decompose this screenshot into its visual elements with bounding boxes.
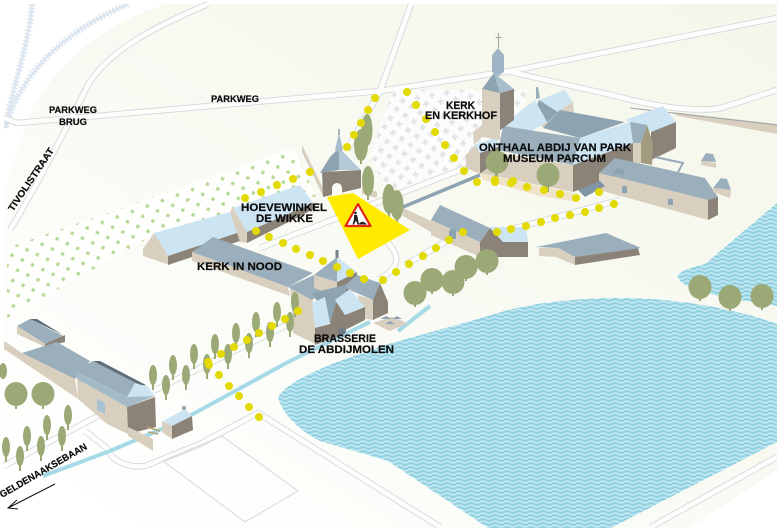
building: kerk in nood — [192, 237, 313, 296]
label: parkweg brug: BRUG — [59, 117, 87, 128]
building: hoevewinkel barn — [143, 185, 316, 265]
entrance steps — [578, 181, 605, 197]
small sheds east — [701, 153, 731, 198]
label: kerk en kerkhof — [425, 100, 497, 122]
lake — [278, 298, 777, 528]
building: gate — [302, 129, 377, 198]
trees: near gate — [354, 114, 404, 224]
label: hoevewinkel de wikke: DE WIKKE — [256, 213, 313, 225]
label: onthaal abdij van park museum parcum: ONTHAAL ABDIJ VAN PARK — [479, 142, 631, 154]
stream — [43, 306, 430, 476]
trees: row along lake — [404, 249, 498, 307]
building: small block west — [17, 319, 65, 347]
label: tivolistraat: TIVOLISTRAAT — [6, 146, 57, 214]
churchyard field — [370, 90, 528, 192]
wall right of abbey — [630, 108, 777, 134]
label: parkweg: PARKWEG — [211, 94, 259, 105]
building: long barn east — [599, 157, 718, 220]
building: flat shed — [536, 233, 641, 265]
building: church tower — [482, 33, 514, 140]
green planted field — [7, 148, 316, 318]
label: brasserie de abdijmolen: DE ABDIJMOLEN — [299, 344, 394, 356]
building: small house by stream — [162, 406, 193, 439]
label: geldenaaksebaan: GELDENAAKSEBAAN — [0, 442, 89, 501]
label: brasserie de abdijmolen — [299, 333, 394, 356]
pond upper right — [678, 203, 777, 306]
building: mill farm — [4, 341, 160, 451]
building: front farm — [403, 175, 528, 257]
trees: round lower left — [0, 363, 54, 409]
railway tracks — [5, 4, 128, 128]
construction zone — [327, 193, 410, 259]
icon: road works sign — [346, 204, 370, 226]
terrace with parasols — [373, 316, 408, 331]
building: brasserie de abdijmolen — [288, 250, 388, 345]
label: onthaal abdij van park museum parcum: MUSEUM PARCUM — [503, 153, 606, 165]
trees: poplars along lane — [149, 292, 299, 400]
label: parkweg brug — [49, 105, 97, 128]
walking route dots — [204, 88, 618, 421]
label: hoevewinkel de wikke — [241, 202, 327, 225]
label: hoevewinkel de wikke: HOEVEWINKEL — [241, 202, 327, 214]
label: kerk en kerkhof: EN KERKHOF — [425, 110, 497, 122]
label: kerk en kerkhof: KERK — [446, 100, 475, 112]
label: kerk in nood: KERK IN NOOD — [197, 261, 282, 273]
label: parkweg brug: PARKWEG — [49, 105, 97, 116]
trees: abbey forecourt — [486, 150, 560, 192]
label: onthaal abdij van park museum parcum — [479, 142, 631, 165]
trees: by the pond — [688, 275, 774, 311]
trees: poplars lower left — [2, 405, 72, 471]
building: abbey — [466, 87, 676, 201]
label: brasserie de abdijmolen: BRASSERIE — [314, 333, 376, 345]
arrow: towards geldenaaksebaan — [8, 484, 55, 509]
parcel lower left — [163, 436, 298, 522]
